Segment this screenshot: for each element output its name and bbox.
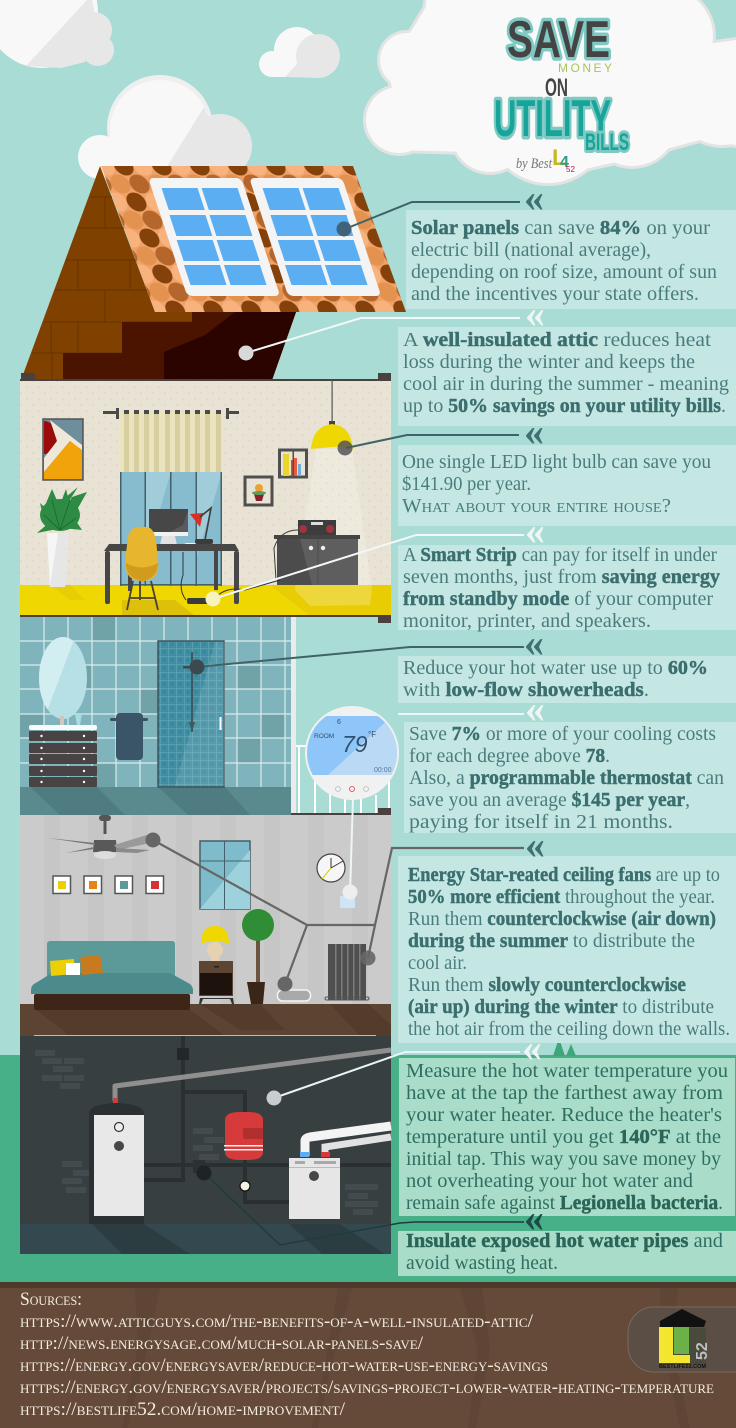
small thermostat	[340, 896, 355, 908]
nightstand	[199, 961, 234, 1004]
red expansion tank	[224, 1112, 263, 1160]
callout line: water temperature	[274, 1052, 520, 1098]
room: bathroom	[20, 617, 391, 815]
text: smart strip: monitor, printer, and speakers.	[403, 610, 651, 632]
text: thermostat: Also, a programmable thermostat can	[409, 767, 724, 789]
callout line: LED	[346, 435, 519, 448]
background: soil	[0, 1282, 736, 1428]
text: showerheads: with low-flow showerheads .	[403, 679, 649, 701]
four wall pictures	[53, 876, 164, 894]
title: BILLS	[585, 129, 629, 156]
text: LED bulb: $141.90 per year.	[402, 473, 531, 495]
chevrons: «	[525, 822, 545, 867]
callout line: insulated pipes	[204, 1173, 524, 1245]
attic interior	[63, 312, 296, 380]
shingled roof	[101, 166, 406, 312]
text: insulate pipes: Insulate exposed hot water pipes and	[406, 1230, 723, 1252]
text: water heater: your water heater. Reduce the heater's	[406, 1104, 722, 1126]
marker dots	[146, 222, 376, 1180]
text: LED bulb: What about your entire house?	[402, 495, 671, 517]
text: solar panels: depending on roof size, amount of sun	[411, 261, 717, 283]
shower	[158, 641, 225, 787]
thermostat callout: 79	[342, 731, 368, 757]
pendant lamp light cone	[295, 449, 372, 606]
second valve	[193, 1160, 205, 1173]
text: water heater: Measure the hot water temperature you	[406, 1060, 728, 1082]
sources list: http://news.energysage.com/much-solar-panels-save/	[20, 1333, 424, 1354]
title: SAVE	[507, 11, 610, 69]
thermostat callout: °F	[368, 730, 376, 739]
cloud: middle behind roof	[78, 75, 252, 181]
bedside lamp	[201, 926, 229, 961]
pressure gauge	[240, 1181, 250, 1191]
text panel: smart strip	[398, 545, 736, 630]
text: water heater: have at the tap the farthest away from	[406, 1082, 723, 1104]
text: water heater	[406, 1060, 728, 1214]
text: ceiling fans: Energy Star-reated ceiling fans are up to	[408, 864, 720, 886]
floor vent	[278, 990, 310, 1001]
text: insulate pipes: avoid wasting heat.	[406, 1252, 558, 1274]
sources list: https://energy.gov/energysaver/reduce-hot-water-use-energy-savings	[20, 1355, 548, 1376]
towel	[110, 713, 148, 760]
sofa	[31, 941, 193, 1010]
sources list: https://energy.gov/energysaver/projects/savings-project-lower-water-heating-temperature	[20, 1377, 714, 1398]
thermostat callout	[305, 706, 400, 800]
solar panel left	[148, 178, 280, 296]
text: thermostat: save you an average $145 per year,	[409, 789, 690, 811]
faint bricks	[35, 1050, 378, 1215]
water heater	[89, 1098, 144, 1224]
chevrons: «	[524, 409, 544, 454]
boiler pipes	[300, 1126, 391, 1157]
title: UTILITY	[494, 90, 611, 148]
grass tufts	[553, 1038, 576, 1056]
curtain	[103, 408, 239, 472]
callout line: thermostat	[350, 714, 524, 892]
text: attic: cool air in during the summer - meaning	[403, 373, 729, 395]
boiler	[289, 1158, 340, 1219]
chevrons	[522, 175, 545, 1240]
computer monitor	[149, 509, 204, 548]
text: LED bulb: One single LED light bulb can save you	[402, 451, 711, 473]
house: attic and roof	[21, 166, 406, 380]
text panel: ceiling fans	[398, 856, 736, 1043]
chevrons: «	[525, 508, 545, 553]
thermostat callout: 6	[337, 719, 341, 726]
logo letters block: 52	[694, 1342, 711, 1360]
text: ceiling fans: (air up) during the winter to distribute	[408, 996, 714, 1018]
bedroom window	[200, 841, 250, 909]
vanity drawers	[29, 725, 97, 787]
balcony railing	[296, 746, 389, 815]
cloud: small centre	[259, 27, 340, 78]
text: smart strip: from standby mode of your computer	[403, 588, 713, 610]
thermostat callout: 00:00	[374, 767, 392, 774]
callout line: solar	[345, 202, 520, 229]
hot pipe	[115, 1050, 391, 1101]
room: basement	[20, 1035, 391, 1254]
smart power strip	[181, 552, 280, 604]
text: showerheads: Reduce your hot water use up to 60%	[403, 657, 708, 679]
sources list	[20, 1289, 714, 1420]
text: ceiling fans: 50% more efficient throughout the year.	[408, 886, 715, 908]
text panel: LED bulb	[398, 445, 736, 526]
gable brick wall	[21, 166, 296, 380]
text panel: showerheads	[398, 656, 736, 703]
chevrons: «	[522, 1025, 542, 1070]
background: grass	[0, 1055, 736, 1283]
text: smart strip	[403, 544, 720, 632]
text: solar panels: Solar panels can save 84% on your	[411, 217, 710, 239]
tree plant	[242, 909, 274, 1004]
text: ceiling fans: Run them counterclockwise (air down)	[408, 908, 716, 930]
cloud: top left	[0, 0, 114, 68]
chevrons: «	[524, 1195, 544, 1240]
text panel: insulate pipes	[398, 1231, 736, 1276]
sources list: Sources:	[20, 1289, 82, 1310]
pipe valve	[177, 1048, 189, 1060]
callout line: smart strip	[213, 535, 524, 599]
pendant lamp	[311, 380, 353, 449]
text: insulate pipes	[406, 1230, 723, 1274]
text panel: water heater	[398, 1057, 736, 1217]
framed flower	[245, 477, 272, 505]
text: attic: loss during the winter and keeps the	[403, 351, 695, 373]
text: ceiling fans: Run them slowly counterclockwise	[408, 974, 686, 996]
window	[120, 472, 222, 586]
text: water heater: initial tap. This way you save money by	[406, 1148, 721, 1170]
dark pipes	[144, 1036, 391, 1202]
text: water heater: temperature until you get 140°F at the	[406, 1126, 721, 1148]
desk lamp	[190, 508, 213, 544]
text: ceiling fans: cool air.	[408, 952, 467, 974]
logo house roof	[660, 1309, 706, 1327]
text: solar panels	[411, 217, 717, 305]
title: 52	[566, 165, 575, 174]
text: thermostat: paying for itself in 21 months.	[409, 811, 673, 833]
title: 4	[560, 154, 569, 171]
radiator	[325, 944, 369, 1000]
logo badge	[628, 1307, 736, 1372]
room: bedroom	[20, 815, 391, 1036]
title: MONEY	[558, 61, 612, 75]
chevrons: «	[525, 291, 545, 336]
title	[494, 11, 629, 174]
text: attic: up to 50% savings on your utility bills.	[403, 395, 726, 417]
callout line: shower	[197, 647, 524, 667]
text panel: thermostat	[404, 722, 736, 833]
text: showerheads	[403, 657, 708, 701]
cloud: large title cloud	[366, 0, 736, 183]
mirror	[39, 637, 87, 719]
text: solar panels: and the incentives your state offers.	[411, 283, 699, 305]
chevrons: «	[525, 686, 545, 731]
wall art	[43, 419, 83, 480]
text: water heater: remain safe against Legionella bacteria.	[406, 1192, 723, 1214]
background: sky	[0, 0, 736, 1056]
desk	[104, 544, 239, 604]
text panel: attic	[398, 327, 736, 426]
text: LED bulb	[402, 451, 711, 517]
sink faucet	[60, 714, 82, 725]
text: attic	[403, 329, 729, 417]
solar panel right	[249, 178, 381, 296]
text panel: solar panels	[406, 210, 736, 309]
logo caption: BESTLIFE52.COM	[659, 1364, 706, 1370]
text: ceiling fans	[408, 864, 730, 1040]
framed books	[280, 450, 306, 477]
ceiling fan	[48, 815, 155, 859]
sources list: https://www.atticguys.com/the-benefits-of-a-well-insulated-attic/	[20, 1311, 534, 1332]
title: by Best	[516, 156, 553, 172]
title: ON	[545, 74, 568, 102]
text: thermostat: for each degree above 78.	[409, 745, 610, 767]
text: ceiling fans: during the summer to distribute the	[408, 930, 695, 952]
thermostat callout: ROOM	[314, 733, 334, 740]
callout line: fan, vent and radiator	[153, 840, 524, 984]
chair	[126, 527, 158, 610]
sources list: https://bestlife52.com/home-improvement/	[20, 1399, 346, 1420]
text: smart strip: seven months, just from saving energy	[403, 566, 720, 588]
sideboard	[274, 535, 360, 585]
callout line: attic	[246, 318, 520, 353]
chevrons: «	[524, 175, 544, 220]
radio	[274, 520, 336, 580]
text: thermostat	[409, 723, 724, 833]
title: L	[552, 145, 566, 170]
room: home office	[20, 373, 391, 623]
text: attic: A well-insulated attic reduces heat	[403, 329, 711, 351]
text: thermostat: Save 7% or more of your cooling costs	[409, 723, 716, 745]
text: solar panels: electric bill (national average),	[411, 239, 651, 261]
chevrons: «	[524, 620, 544, 665]
potted plant	[37, 487, 87, 587]
text: smart strip: A Smart Strip can pay for itself in under	[403, 544, 717, 566]
text: water heater: not overheating your hot water and	[406, 1170, 693, 1192]
wall clock	[317, 854, 345, 882]
